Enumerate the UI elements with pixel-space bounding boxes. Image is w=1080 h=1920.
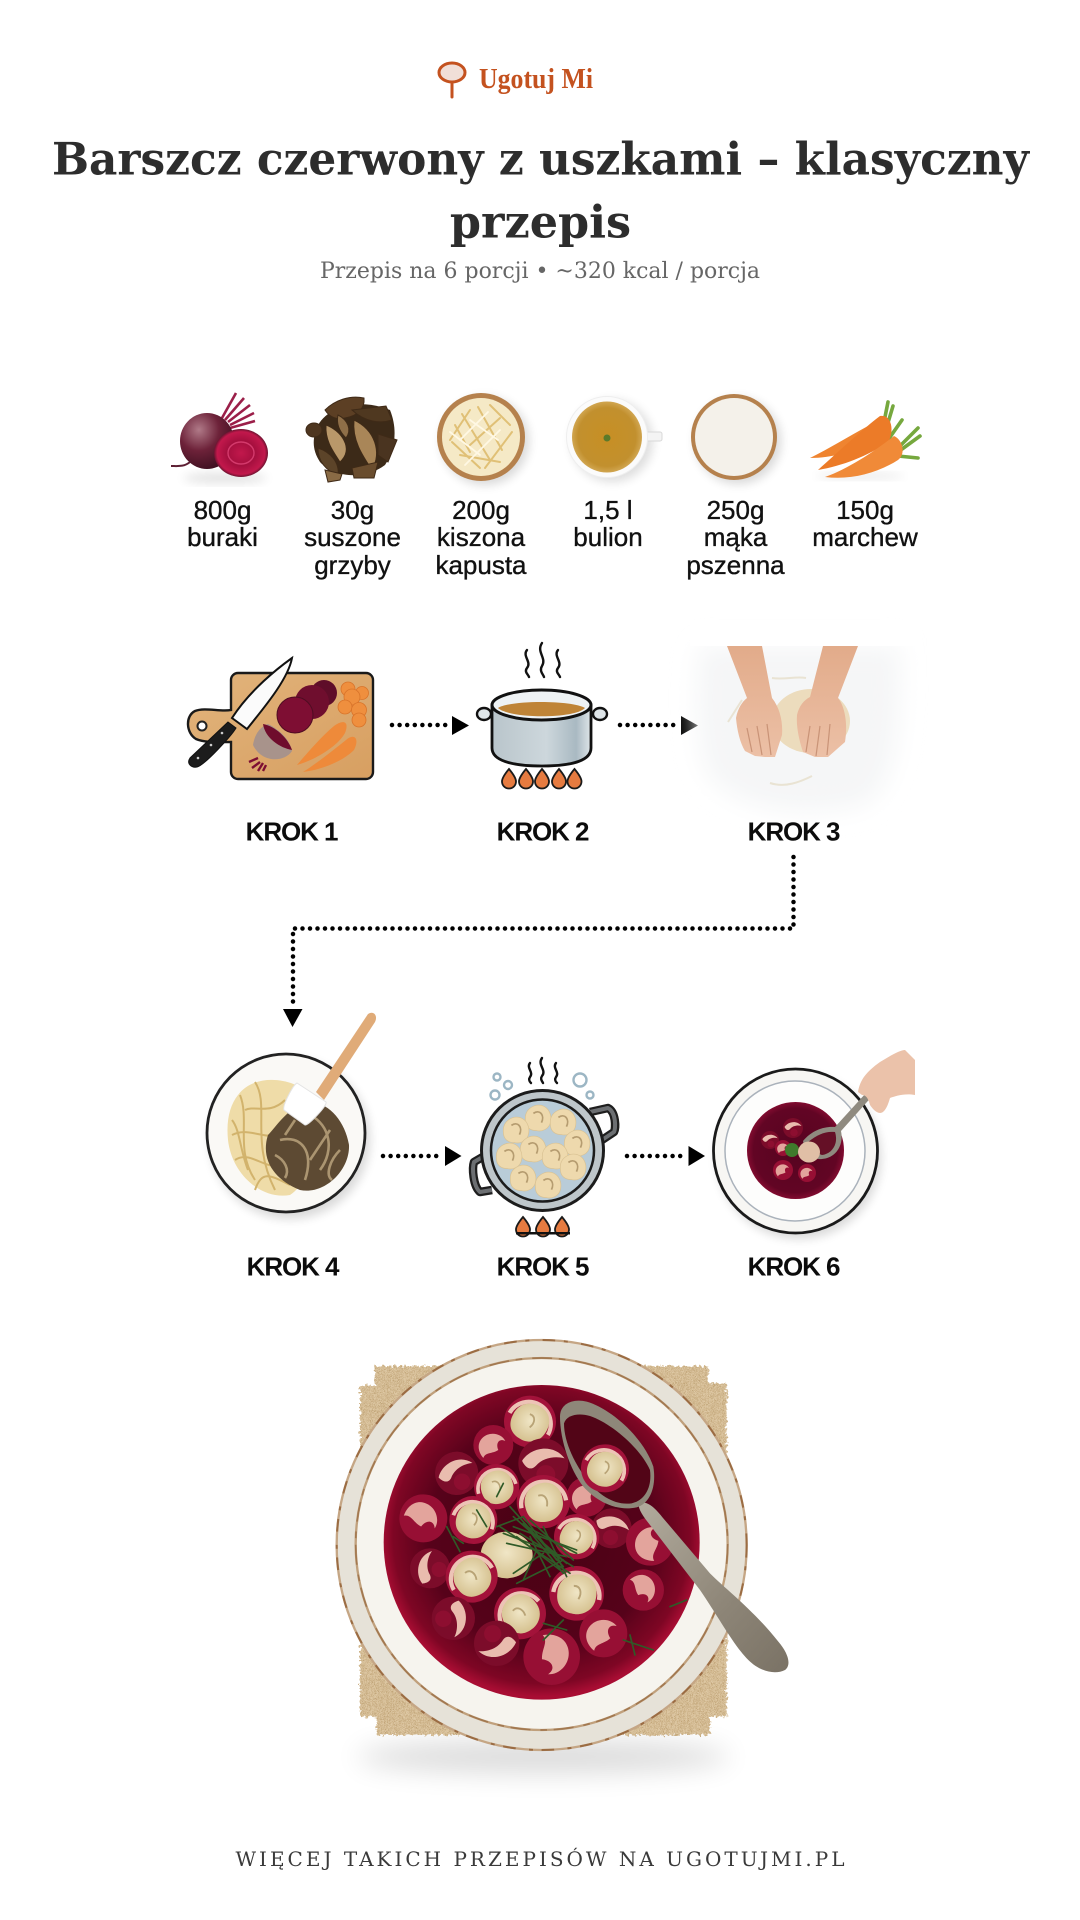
ingredient labels: suszone [304, 522, 401, 552]
spoon [803, 1060, 901, 1159]
step labels row 1: KROK 2 [497, 816, 589, 846]
ingredient labels: pszenna [686, 550, 785, 580]
ingredient labels: 150g [836, 495, 894, 525]
panel: ingredients [171, 393, 920, 580]
step labels row 2: KROK 4 [247, 1252, 340, 1282]
arrow: step 1 to 2 [392, 716, 469, 735]
icon: flames [516, 1217, 570, 1236]
title: Barszcz czerwony z uszkami – klasyczny [52, 134, 1030, 186]
icon: knife [189, 658, 292, 767]
hand [858, 1050, 915, 1113]
ingredient labels: 1,5 l [583, 495, 633, 525]
burlap napkin [360, 1366, 727, 1735]
arrow: step 4 to 5 [383, 1146, 462, 1166]
step labels row 2: KROK 5 [497, 1252, 589, 1282]
dill [785, 1143, 799, 1157]
ingredient labels: grzyby [314, 550, 391, 580]
uszka dumplings [391, 1386, 684, 1695]
step labels row 1 [246, 816, 840, 846]
ingredient: flour bowl [691, 394, 781, 484]
ingredient labels: buraki [187, 522, 258, 552]
arrow: connector from step 3 to step 4 [283, 857, 794, 1027]
icon: dumplings [525, 1105, 551, 1131]
icon: flames [502, 769, 582, 788]
ingredient labels: kapusta [435, 550, 527, 580]
subtitle: Przepis na 6 porcji • ~320 kcal / porcja [320, 259, 760, 284]
footer call to action: WIĘCEJ TAKICH PRZEPISÓW NA UGOTUJMI.PL [236, 1846, 844, 1871]
step 1: cutting board [188, 658, 373, 779]
flour scatter [728, 677, 812, 785]
ingredient labels: kiszona [437, 522, 526, 552]
step labels row 2: KROK 6 [748, 1252, 840, 1282]
step 5: pot with dumplings [473, 1058, 615, 1236]
ingredient: carrots [810, 402, 920, 479]
ingredient: sauerkraut bowl [437, 393, 529, 485]
ingredient labels: 200g [452, 495, 510, 525]
soup [384, 1385, 700, 1700]
ingredient labels [187, 495, 918, 580]
arrow: step 2 to 3 [620, 716, 698, 735]
icon: bubbles [490, 1074, 594, 1100]
ingredient labels: 800g [194, 495, 251, 525]
step labels row 1: KROK 1 [246, 816, 338, 846]
step labels row 2 [247, 1252, 840, 1282]
noodles [227, 1080, 314, 1196]
arrow: step 5 to 6 [627, 1146, 705, 1166]
logo [439, 63, 593, 97]
ingredient labels: bulion [573, 522, 643, 552]
dough [772, 689, 850, 753]
title: przepis [450, 196, 631, 248]
hero: bowl of barszcz with uszka [337, 1340, 788, 1773]
spoon [560, 1401, 788, 1672]
icon: beet slices [249, 680, 337, 771]
ingredient labels: mąka [704, 522, 768, 552]
icon: pot body [492, 706, 591, 766]
dill garnish [447, 1483, 687, 1655]
bowl [356, 1358, 728, 1730]
hands and arms [727, 646, 858, 757]
step 4: mixing bowl [207, 1013, 376, 1219]
icon: ladle logo mark [439, 63, 465, 97]
spatula [316, 1013, 376, 1100]
icon: handles [477, 708, 607, 720]
title [52, 134, 1030, 248]
ingredient: dried mushrooms [306, 397, 397, 482]
step 2: pot on flames [477, 643, 607, 788]
step 6: served soup [714, 1050, 915, 1239]
icon: steam [529, 1058, 557, 1083]
ingredient: broth cup [566, 396, 662, 482]
step 3: kneading dough [690, 620, 920, 812]
shadow [357, 1740, 730, 1773]
ingredient labels: 30g [331, 495, 374, 525]
mushrooms [266, 1103, 349, 1191]
brand name: Ugotuj Mi [479, 64, 593, 95]
icon: steam [526, 643, 560, 677]
ingredient labels: 250g [707, 495, 764, 525]
flour surface shade [697, 646, 900, 812]
ingredient: beetroot [171, 393, 268, 483]
ingredient labels: marchew [812, 522, 918, 552]
finger lines [747, 724, 830, 756]
icon: pot rim and water [482, 1090, 604, 1210]
icon: carrot slices and carrots [297, 682, 368, 772]
step labels row 1: KROK 3 [748, 816, 840, 846]
icon: board [188, 673, 373, 779]
icon: pot handles [473, 1108, 615, 1192]
dumplings [761, 1118, 816, 1182]
plate [337, 1340, 747, 1750]
